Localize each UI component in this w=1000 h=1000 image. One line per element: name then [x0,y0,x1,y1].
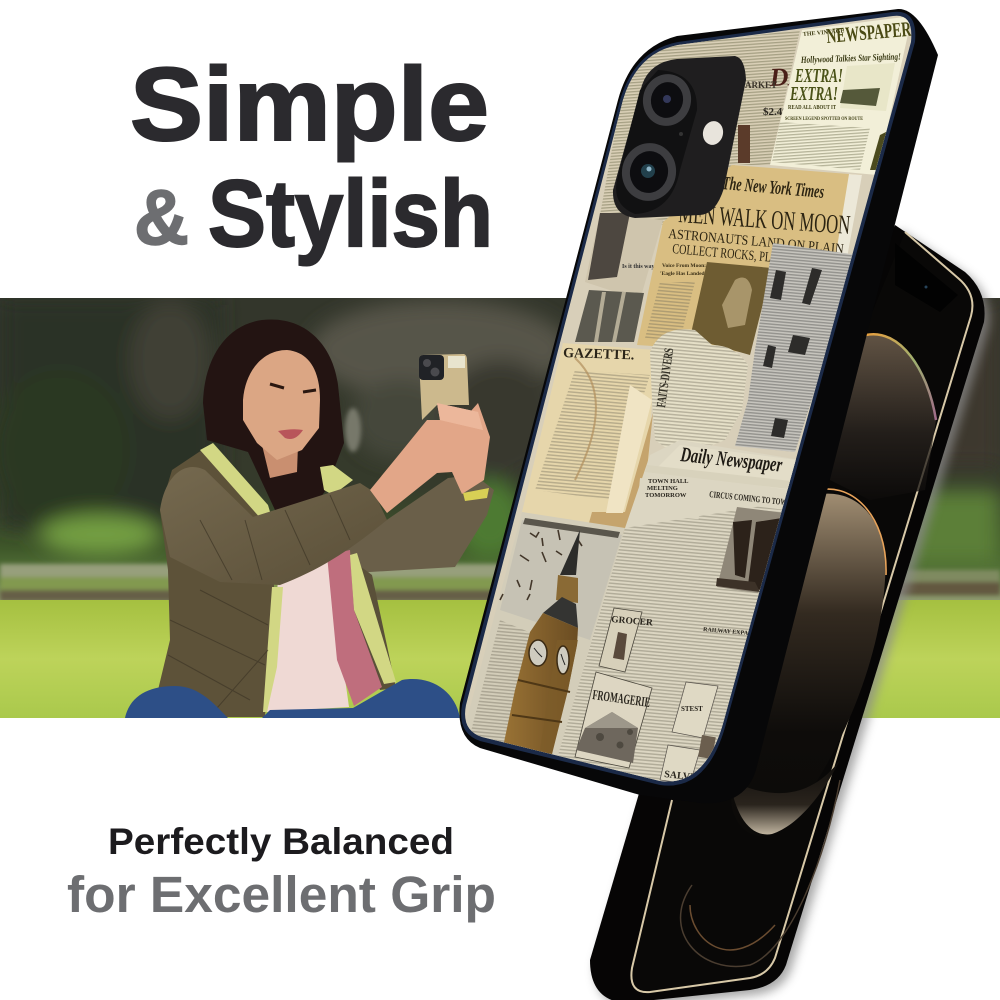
near arm sleeve [160,467,387,585]
Daily Newspaper page: CIRCUS COMING TO TOWN [709,489,792,508]
hair [203,319,344,525]
back phone: black smartphone with gold edge [590,225,990,1000]
vintage newspaper page: THE VINTAGE [803,28,845,38]
Daily Newspaper page: TOMORROW [645,492,687,499]
caption: Perfectly Balanced for Excellent Grip [67,821,496,923]
grocer ad [599,608,653,672]
vintage newspaper page: EXTRA! [789,83,838,105]
heading: Simple & Stylish: & [134,173,189,261]
yellow lining [200,443,396,712]
heading: Simple & Stylish [130,47,493,267]
grocer ad: GROCER [611,615,653,629]
camera island [613,56,746,218]
grey clippings page [735,243,858,452]
New York Times page: The New York Times [722,173,825,203]
lower lens [617,138,681,206]
New York Times page [637,165,862,355]
New York Times page: Voice From Moon: [662,263,706,269]
torso jacket [158,450,274,717]
neck [262,445,298,478]
newspaper collage: ARKET [745,80,777,90]
New York Times page: COLLECT ROCKS, PLANT [672,242,793,267]
clock tower [503,530,580,754]
top left columns [616,38,726,128]
birds [500,530,582,600]
caption: Perfectly Balanced for Excellent Grip: Perfectly Balanced [108,821,454,862]
caption: Perfectly Balanced for Excellent Grip: for Excellent Grip [67,866,496,923]
right jacket panel [345,555,396,690]
front phone case [450,0,938,803]
shirt [267,555,349,712]
vintage newspaper page [770,16,913,175]
vintage newspaper page: NEWSPAPER [825,17,913,48]
case body [459,9,938,803]
vintage newspaper page: SCREEN LEGEND SPOTTED ON ROUTE [785,116,863,122]
face [243,350,320,460]
flash [701,119,725,147]
grass [0,600,1000,718]
blue rim [461,12,915,786]
vintage newspaper page: EXTRA! [794,65,843,87]
upper lens [638,70,696,130]
Daily Newspaper page: Daily Newspaper [679,442,784,477]
Big Ben section [460,512,625,765]
plaid shirt [327,550,382,706]
hands and forearm [370,403,490,513]
gazette page: GAZETTE. [563,346,635,363]
fromagerie ad: FROMAGERIE [591,688,651,711]
left photos: Is it this way? [622,264,658,270]
elephants photo [717,507,785,593]
bottom small ads [672,682,718,738]
left photos [575,213,663,342]
fromagerie ad [575,672,652,768]
Daily Newspaper page: SALVE [664,769,697,783]
New York Times page: MEN WALK ON MOON [678,198,851,240]
Daily Newspaper page [555,440,800,790]
vintage newspaper page: Hollywood Talkies Star Sighting! [800,53,901,66]
newspaper collage: $2.49 [763,106,788,118]
heading: Simple & Stylish: Stylish [208,161,493,267]
watch band [463,488,489,501]
wallpaper arcs [681,334,936,966]
New York Times page: 'Eagle Has Landed' [660,271,707,277]
Daily Newspaper page: RAILWAY EXPANDS [703,627,761,638]
faits-divers clipping: FAITS-DIVERS [653,347,676,408]
far arm [340,475,494,575]
Daily Newspaper page: MELTING [647,485,678,492]
astronaut photo [690,262,772,355]
heading: Simple & Stylish: Simple [130,47,489,163]
gazette page [522,343,655,535]
person: woman taking a photo [125,319,494,718]
earpiece notch [895,243,958,312]
newspaper collage: DA [768,62,806,92]
faits-divers clipping [650,329,748,458]
photo band: park background [0,298,1000,718]
Daily Newspaper page: STEST [681,705,703,713]
vintage newspaper page: READ ALL ABOUT IT [788,104,836,111]
background path [0,564,1000,601]
jeans [125,679,460,718]
New York Times page: ASTRONAUTS LAND ON PLAIN [668,227,844,257]
Daily Newspaper page: TOWN HALL [648,478,689,485]
small phone in hands [419,354,483,430]
newspaper collage [465,16,912,782]
